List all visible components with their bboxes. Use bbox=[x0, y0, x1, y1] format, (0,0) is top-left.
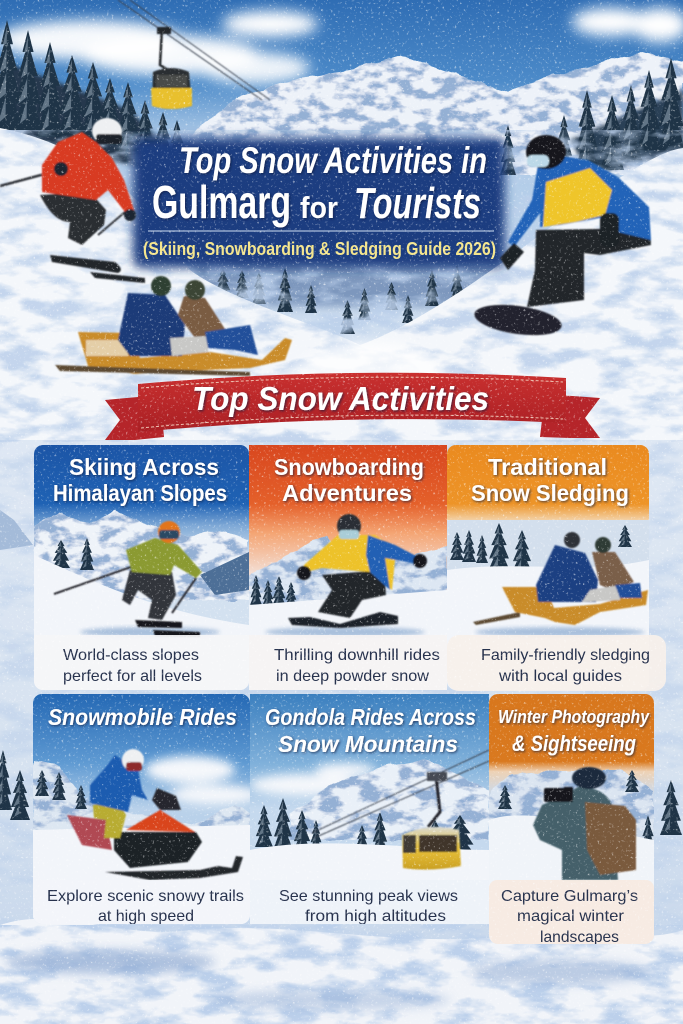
snowboarder figure bbox=[288, 514, 427, 628]
photography title bbox=[498, 707, 650, 756]
ribbon heading: Top Snow Activities bbox=[192, 380, 489, 417]
side snow and distant scenery bbox=[0, 440, 683, 930]
snowboarding title: Adventures bbox=[282, 480, 412, 506]
sledging caption: Family-friendly sledging bbox=[481, 647, 650, 664]
subtitle: (Skiing, Snowboarding & Sledging Guide 2026) bbox=[143, 239, 496, 259]
skiing caption: World-class slopes bbox=[63, 647, 199, 664]
panel: sledging bbox=[447, 445, 649, 690]
photography title: Winter Photography bbox=[498, 707, 650, 727]
panel: snowmobile bbox=[33, 694, 260, 925]
snowmobile caption: at high speed bbox=[98, 908, 194, 925]
panel: gondola bbox=[250, 694, 489, 925]
gondola caption bbox=[280, 890, 458, 924]
skier figure bbox=[54, 521, 202, 637]
sledging caption: with local guides bbox=[498, 668, 622, 685]
sledging title: Snow Sledging bbox=[471, 480, 629, 506]
sledging title bbox=[471, 454, 629, 506]
skiing title: Himalayan Slopes bbox=[53, 480, 227, 506]
panel: skiing bbox=[34, 445, 249, 691]
title line 1: Top Snow Activities in bbox=[179, 140, 487, 181]
title line 2: for bbox=[300, 190, 338, 225]
photography caption bbox=[489, 880, 654, 946]
title line 2 bbox=[152, 176, 481, 228]
panel: photography bbox=[489, 694, 656, 946]
gondola caption: See stunning peak views bbox=[279, 888, 458, 905]
snowboarding caption bbox=[265, 635, 440, 684]
photography title: & Sightseeing bbox=[512, 731, 636, 756]
gondola figure bbox=[312, 750, 489, 870]
snowboarding title: Snowboarding bbox=[274, 454, 424, 480]
snow slopes bbox=[0, 128, 683, 442]
snowboarding caption: in deep powder snow bbox=[276, 668, 429, 685]
snowboarder bbox=[472, 135, 651, 340]
skiing title: Skiing Across bbox=[69, 454, 219, 480]
gondola title: Snow Mountains bbox=[278, 731, 458, 757]
gondola title bbox=[265, 704, 476, 757]
gondola top bbox=[118, 0, 270, 109]
sled with two riders bbox=[55, 276, 292, 376]
valley trees bbox=[195, 258, 505, 334]
snowboarding title bbox=[274, 454, 424, 506]
forest right bbox=[500, 58, 683, 175]
clouds bbox=[0, 8, 683, 84]
ribbon banner bbox=[105, 373, 600, 440]
panel: snowboarding bbox=[249, 445, 447, 691]
snowmobile figure bbox=[67, 749, 243, 880]
sledging caption bbox=[447, 635, 666, 691]
gondola caption: from high altitudes bbox=[305, 908, 446, 925]
sled riders bbox=[473, 532, 648, 625]
photography caption: magical winter bbox=[517, 908, 625, 925]
photography caption: Capture Gulmarg’s bbox=[501, 888, 638, 905]
mountains bbox=[190, 52, 683, 175]
photographer figure bbox=[533, 767, 636, 880]
photography caption: landscapes bbox=[540, 929, 619, 946]
skiing caption: perfect for all levels bbox=[63, 668, 202, 685]
gondola title: Gondola Rides Across bbox=[265, 704, 476, 730]
snowmobile title: Snowmobile Rides bbox=[48, 704, 237, 730]
forest left bbox=[0, 20, 186, 175]
title banner bbox=[133, 138, 505, 268]
lower snow field bbox=[0, 919, 683, 1024]
skiing title bbox=[53, 454, 227, 506]
skier red bbox=[0, 118, 145, 283]
skiing caption bbox=[34, 635, 249, 691]
title line 2: Tourists bbox=[354, 179, 481, 228]
sledging title: Traditional bbox=[488, 454, 607, 480]
snowboarding caption: Thrilling downhill rides bbox=[274, 647, 440, 664]
title line 2: Gulmarg bbox=[152, 176, 291, 228]
snowmobile caption bbox=[33, 880, 250, 925]
snowmobile caption: Explore scenic snowy trails bbox=[47, 888, 244, 905]
